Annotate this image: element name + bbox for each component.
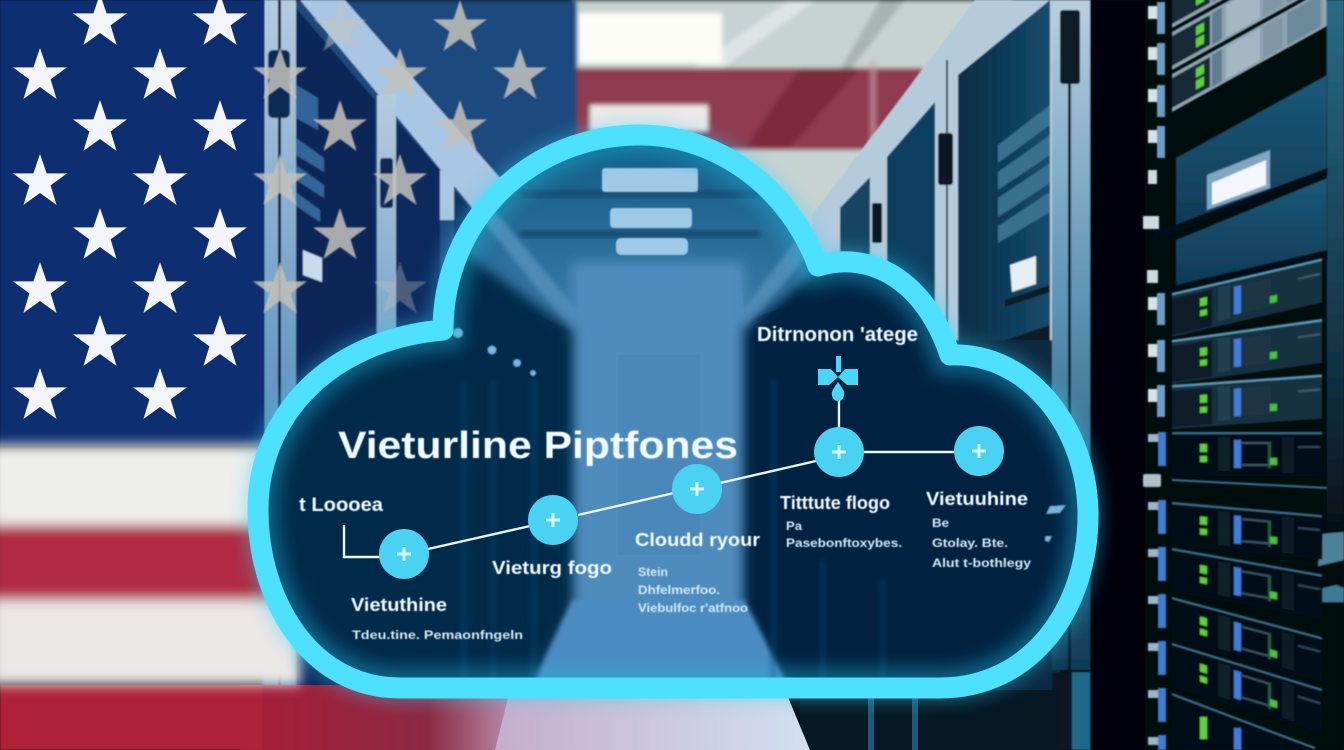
label: top node: Ditrnonon 'atege xyxy=(757,324,918,346)
block: step 5 xyxy=(926,489,1031,570)
final partial row xyxy=(1172,693,1315,750)
title: Vieturline Piptfones xyxy=(338,425,738,467)
cloud glow xyxy=(258,135,1088,688)
block: step 2: Vieturg fogo xyxy=(492,558,612,578)
diagonal top beam xyxy=(300,0,578,335)
large blank panels xyxy=(1176,75,1327,232)
node 2 xyxy=(528,495,578,545)
ceiling lights xyxy=(602,168,698,255)
diagonal top frame xyxy=(812,0,1060,750)
server units lower xyxy=(1143,258,1327,750)
node 5 xyxy=(954,426,1004,476)
ceiling inside the cloud xyxy=(467,146,818,328)
cloud interior xyxy=(268,146,1078,678)
left server racks xyxy=(262,0,578,750)
rack units xyxy=(296,85,324,222)
block: step 5: Gtolay. Bte. xyxy=(932,536,1008,550)
label: first step: t Loooea xyxy=(299,495,383,516)
block: step 4 xyxy=(780,493,902,550)
block: step 5: Alut t-bothlegy xyxy=(932,556,1031,570)
rack leds xyxy=(453,328,1066,542)
handle on far right xyxy=(1318,532,1344,566)
block: step 3: Stein xyxy=(638,565,668,579)
display box xyxy=(1207,150,1270,210)
back wall xyxy=(572,262,744,612)
inner glow xyxy=(258,135,1088,688)
rack handles xyxy=(268,50,290,118)
ceiling backdrop xyxy=(572,0,1012,330)
icon: deployment glyph xyxy=(818,356,858,401)
right server racks xyxy=(812,0,1344,750)
block: step 1 xyxy=(351,595,523,642)
node 4 xyxy=(814,427,864,477)
vertical rack stripes xyxy=(460,380,886,690)
block: step 5: Vietuuhine xyxy=(926,489,1028,509)
left rack xyxy=(332,251,581,678)
cloud outline xyxy=(258,135,1088,688)
floor strip below the cloud xyxy=(240,685,1060,750)
dark lower bulk xyxy=(812,340,1060,750)
cloud panel xyxy=(250,120,1100,700)
block: step 4: Titttute flogo xyxy=(780,493,890,513)
floor xyxy=(534,598,786,678)
faded stars over racks xyxy=(253,0,547,313)
block: step 3: Cloudd ryour xyxy=(635,530,760,550)
block: step 4: Pa xyxy=(786,519,802,533)
block: step 5: Be xyxy=(932,516,949,530)
American flag xyxy=(0,0,547,750)
block: step 3: Viebulfoc r'atfnoo xyxy=(638,601,748,615)
server units upper xyxy=(1143,0,1327,302)
flag stars xyxy=(13,0,247,419)
block: step 1: Vietuthine xyxy=(351,595,447,615)
block: step 4: Pasebonftoxybes. xyxy=(786,536,902,550)
pipeline connectors xyxy=(344,400,956,557)
pipeline nodes xyxy=(379,426,1004,579)
panel rack rows xyxy=(998,105,1050,243)
block: step 3: Dhfelmerfoo. xyxy=(638,583,720,597)
node 1 xyxy=(379,529,429,579)
block: step 3 xyxy=(635,530,760,615)
right rack xyxy=(735,270,975,678)
block: step 1: Tdeu.tine. Pemaonfngeln xyxy=(352,628,523,642)
node 3 xyxy=(672,464,722,514)
diagonal beams xyxy=(486,211,574,329)
